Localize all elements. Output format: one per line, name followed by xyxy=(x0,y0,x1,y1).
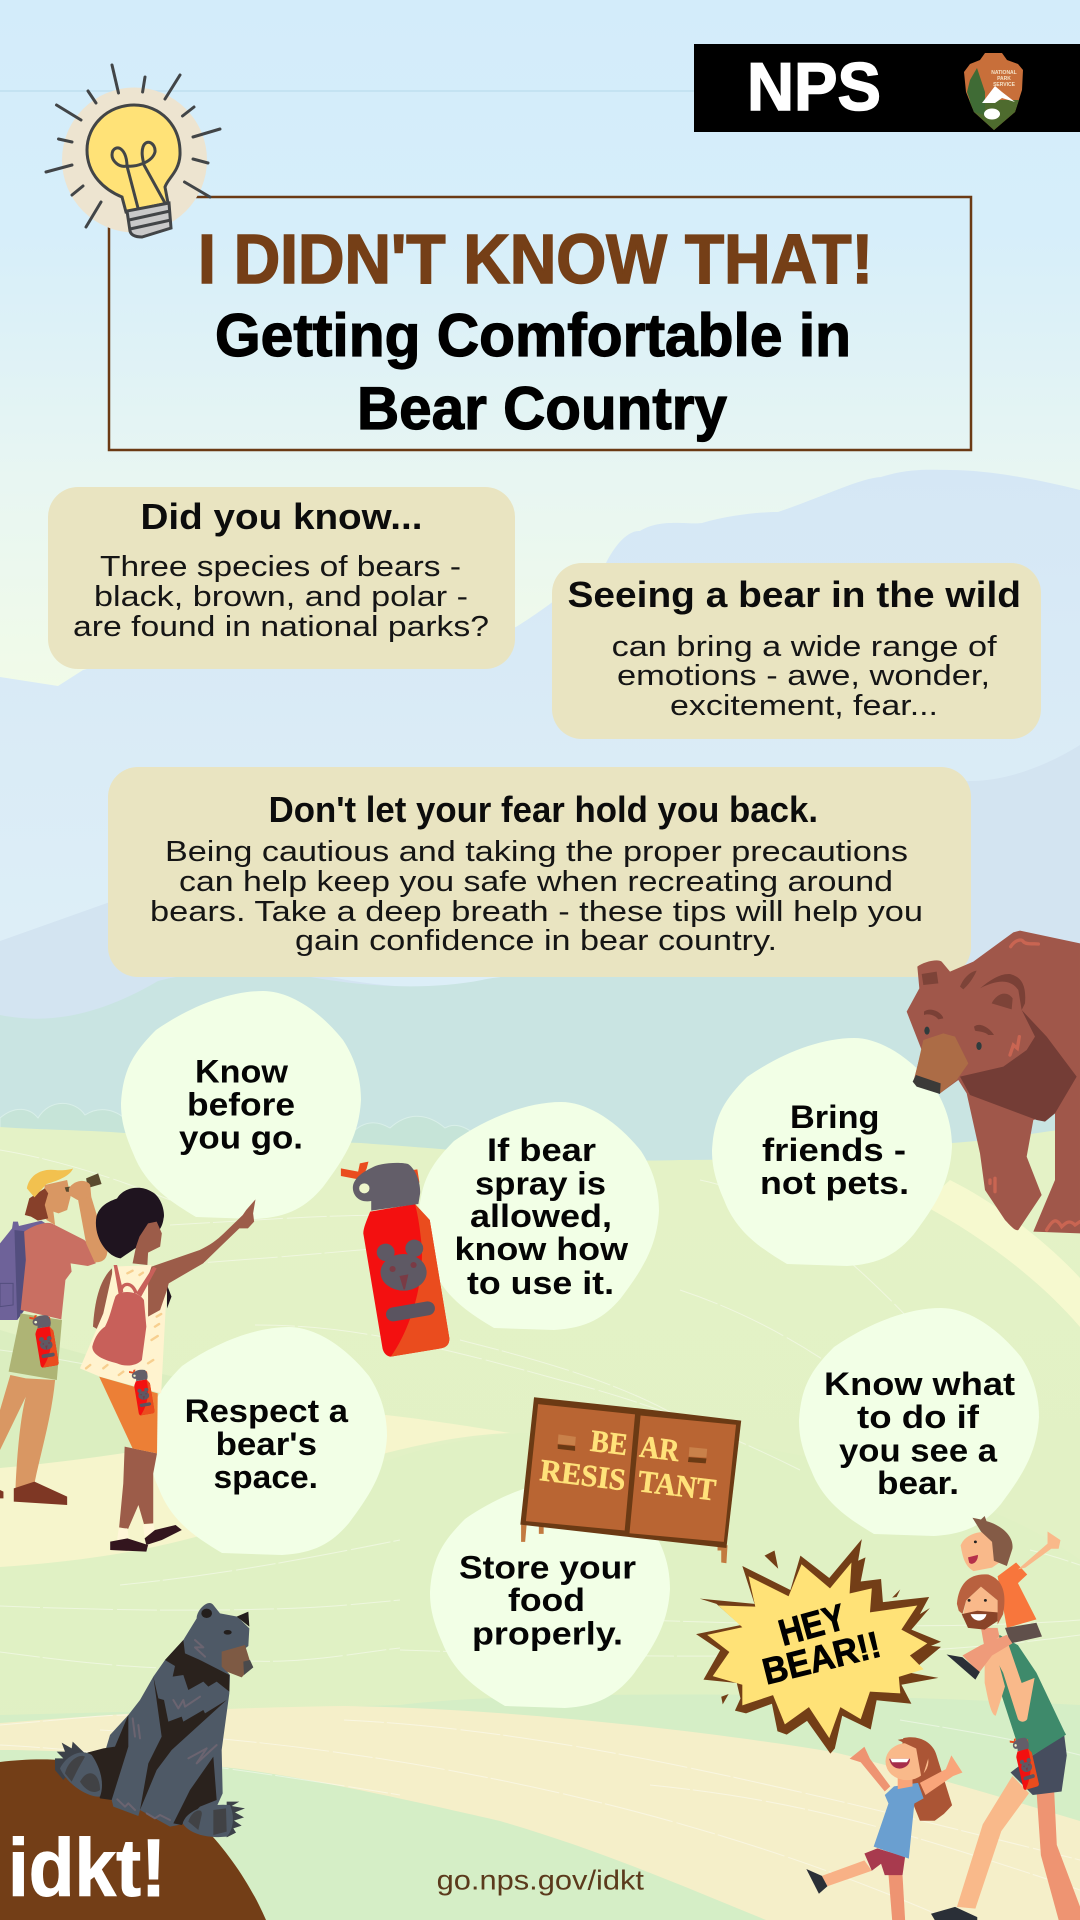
background: teal ridge xyxy=(0,965,1080,1220)
icon: NPS arrowhead: SERVICE xyxy=(993,82,1016,88)
tip: know what to do: to do if xyxy=(857,1399,979,1435)
icon: NPS arrowhead xyxy=(964,53,1023,130)
subtitle line 2: Bear Country xyxy=(357,375,728,442)
tip: bear spray xyxy=(419,1102,659,1330)
body: emotions: excitement, fear... xyxy=(670,690,938,722)
burst text: HEY xyxy=(774,1596,850,1654)
tip: store your food: properly. xyxy=(472,1616,623,1652)
background: winding path right xyxy=(923,1180,1080,1327)
tip: know before you go xyxy=(121,991,361,1219)
tip: store your food xyxy=(430,1480,670,1708)
background: near mountain xyxy=(0,745,1080,1100)
tip: know what to do: bear. xyxy=(877,1465,959,1501)
body: emotions: emotions - awe, wonder, xyxy=(617,660,990,692)
mound xyxy=(0,1759,266,1920)
dad with child on shoulders xyxy=(931,1516,1080,1920)
background: far mountain xyxy=(0,470,1080,1100)
title box xyxy=(109,197,971,450)
tip: bear spray: to use it. xyxy=(467,1265,614,1301)
tip: bear spray: spray is xyxy=(475,1166,606,1202)
panel: seeing a bear xyxy=(552,563,1041,739)
body: precautions: Being cautious and taking the proper precautions xyxy=(165,836,908,868)
illustration: spray can xyxy=(341,1162,449,1357)
background: lower green band xyxy=(0,1694,1080,1920)
illustration: black bear xyxy=(55,1603,253,1837)
body: three species: Three species of bears - xyxy=(100,551,461,583)
NPS banner xyxy=(694,44,1080,132)
icon: light bulb xyxy=(46,65,220,237)
small spray cans xyxy=(29,1315,59,1368)
background: mid shading band xyxy=(0,1432,1080,1700)
tip: respect a bear's space: space. xyxy=(214,1459,318,1495)
title: I DIDN'T KNOW THAT! xyxy=(198,220,873,298)
illustration: family xyxy=(806,1516,1080,1920)
woman pointing xyxy=(80,1188,256,1552)
heading: seeing a bear: Seeing a bear in the wild xyxy=(568,574,1021,615)
NPS wordmark: NPS xyxy=(747,49,881,125)
background: lower trail xyxy=(0,1706,1080,1920)
tip: know before you go: before xyxy=(187,1086,295,1122)
tip: bring friends: not pets. xyxy=(760,1165,909,1201)
body: emotions: can bring a wide range of xyxy=(612,631,998,663)
tip: bring friends: friends - xyxy=(762,1132,906,1168)
tip: bring friends xyxy=(712,1038,952,1266)
tip: know before you go: Know xyxy=(195,1054,288,1090)
panel: don't let your fear xyxy=(108,767,971,977)
girl jumping xyxy=(806,1737,962,1920)
background: distant trees xyxy=(0,1103,490,1150)
body: three species: black, brown, and polar - xyxy=(94,581,468,613)
tip: know what to do xyxy=(799,1308,1039,1536)
heading: did you know: Did you know... xyxy=(140,496,422,537)
tip: know what to do: Know what xyxy=(824,1366,1015,1402)
man with binoculars xyxy=(0,1168,107,1505)
body: emotions xyxy=(612,631,998,722)
body: precautions: gain confidence in bear country. xyxy=(295,925,777,957)
tip: store your food: food xyxy=(508,1582,585,1618)
heading: don't let your fear: Don't let your fear hold you back. xyxy=(269,789,818,830)
callout: hey bear burst xyxy=(696,1539,941,1754)
tip: respect a bear's space: bear's xyxy=(216,1426,317,1462)
illustration: bear resistant sign xyxy=(520,1397,741,1563)
body: precautions xyxy=(150,836,923,957)
illustration: hikers xyxy=(0,1168,256,1552)
body: three species: are found in national parks? xyxy=(73,611,489,643)
tip: respect a bear's space xyxy=(147,1327,387,1555)
icon: NPS arrowhead: NATIONAL xyxy=(991,70,1017,76)
body: precautions: bears. Take a deep breath - these tips will help you xyxy=(150,896,923,928)
tip: bear spray: know how xyxy=(454,1231,628,1267)
illustration: bear resistant sign: RESIS xyxy=(538,1452,628,1497)
tip: respect a bear's space: Respect a xyxy=(185,1393,348,1429)
tip: know what to do: you see a xyxy=(839,1432,997,1468)
tip: bear spray: allowed, xyxy=(470,1198,612,1234)
body: three species xyxy=(73,551,489,643)
tip: bring friends: Bring xyxy=(790,1099,880,1135)
tip: know before you go: you go. xyxy=(179,1120,303,1156)
tip: store your food: Store your xyxy=(459,1550,636,1586)
background: left shading band xyxy=(0,1330,386,1480)
panel: did you know xyxy=(48,487,515,669)
illustration: bear resistant sign: TANT xyxy=(636,1463,718,1507)
icon: NPS arrowhead: PARK xyxy=(997,76,1011,82)
background: green hills xyxy=(0,1127,1080,1920)
illustration: brown bear xyxy=(907,931,1080,1233)
illustration: bear resistant sign: AR xyxy=(638,1429,682,1468)
subtitle line 1: Getting Comfortable in xyxy=(215,302,851,369)
callout: hey bear burst: BEAR!! xyxy=(758,1624,885,1693)
sign text: BE xyxy=(589,1423,630,1462)
body: precautions: can help keep you safe when recreating around xyxy=(179,866,893,898)
background: winding path left xyxy=(0,1415,510,1567)
tip: bear spray: If bear xyxy=(487,1132,596,1168)
logo: idkt: idkt! xyxy=(8,1823,166,1914)
url footer: go.nps.gov/idkt xyxy=(437,1865,644,1896)
